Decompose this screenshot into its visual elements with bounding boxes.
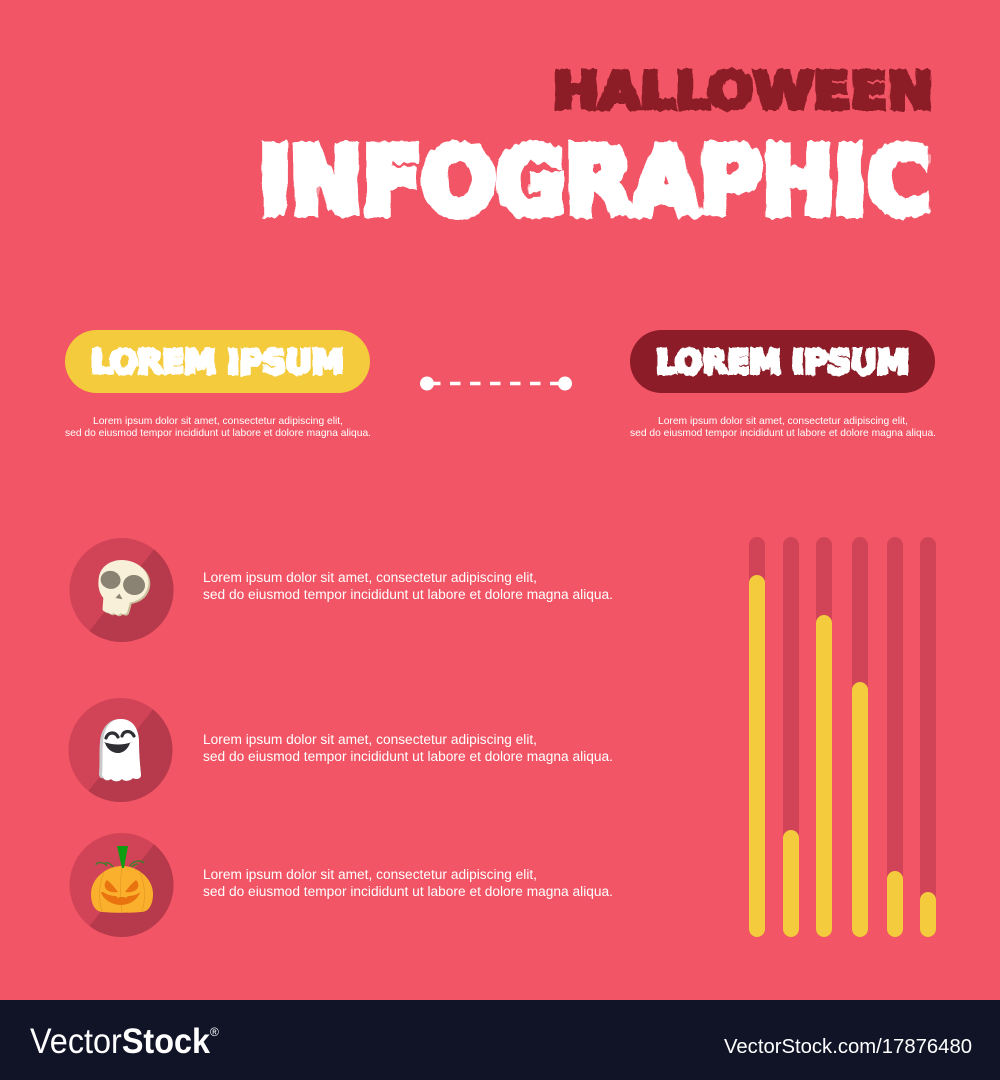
left description bbox=[65, 415, 371, 439]
connector bbox=[420, 376, 572, 390]
footer bar bbox=[0, 1000, 1000, 1080]
panel: left label bbox=[65, 330, 371, 439]
icon: pumpkin bbox=[70, 833, 174, 937]
text block: ghost bbox=[203, 732, 613, 764]
heading: Halloween: HALLOWEEN bbox=[553, 62, 933, 120]
panel: right label bbox=[630, 330, 936, 439]
text block: pumpkin: Lorem ipsum dolor sit amet, consectetur adipiscing elit, bbox=[203, 867, 537, 882]
image id: VectorStock.com/17876480 bbox=[724, 1035, 972, 1058]
text block: pumpkin: sed do eiusmod tempor incididunt ut labore et dolore magna aliqua. bbox=[203, 884, 613, 899]
yellow pill bbox=[65, 330, 370, 393]
bar chart bbox=[749, 537, 936, 937]
title bbox=[258, 62, 933, 235]
right description: Lorem ipsum dolor sit amet, consectetur adipiscing elit, bbox=[658, 415, 908, 427]
dark red pill bbox=[630, 330, 935, 393]
left description: Lorem ipsum dolor sit amet, consectetur adipiscing elit, bbox=[93, 415, 343, 427]
text block: skull: sed do eiusmod tempor incididunt ut labore et dolore magna aliqua. bbox=[203, 587, 613, 602]
icon: skull bbox=[70, 538, 174, 642]
text block: skull bbox=[203, 570, 613, 602]
icon: ghost bbox=[68, 698, 172, 802]
heading: Infographic: INFOGRAPHIC bbox=[258, 128, 930, 235]
right description bbox=[630, 415, 936, 439]
pill text: LOREM IPSUM bbox=[91, 343, 344, 381]
registered mark: ® bbox=[210, 1025, 219, 1039]
logo wordmark: VectorStock bbox=[30, 1022, 210, 1061]
text block: ghost: sed do eiusmod tempor incididunt ut labore et dolore magna aliqua. bbox=[203, 749, 613, 764]
pill text: LOREM IPSUM bbox=[656, 343, 909, 381]
left description: sed do eiusmod tempor incididunt ut labore et dolore magna aliqua. bbox=[65, 427, 371, 439]
text block: pumpkin bbox=[203, 867, 613, 899]
text block: ghost: Lorem ipsum dolor sit amet, consectetur adipiscing elit, bbox=[203, 732, 537, 747]
right description: sed do eiusmod tempor incididunt ut labore et dolore magna aliqua. bbox=[630, 427, 936, 439]
text block: skull: Lorem ipsum dolor sit amet, consectetur adipiscing elit, bbox=[203, 570, 537, 585]
